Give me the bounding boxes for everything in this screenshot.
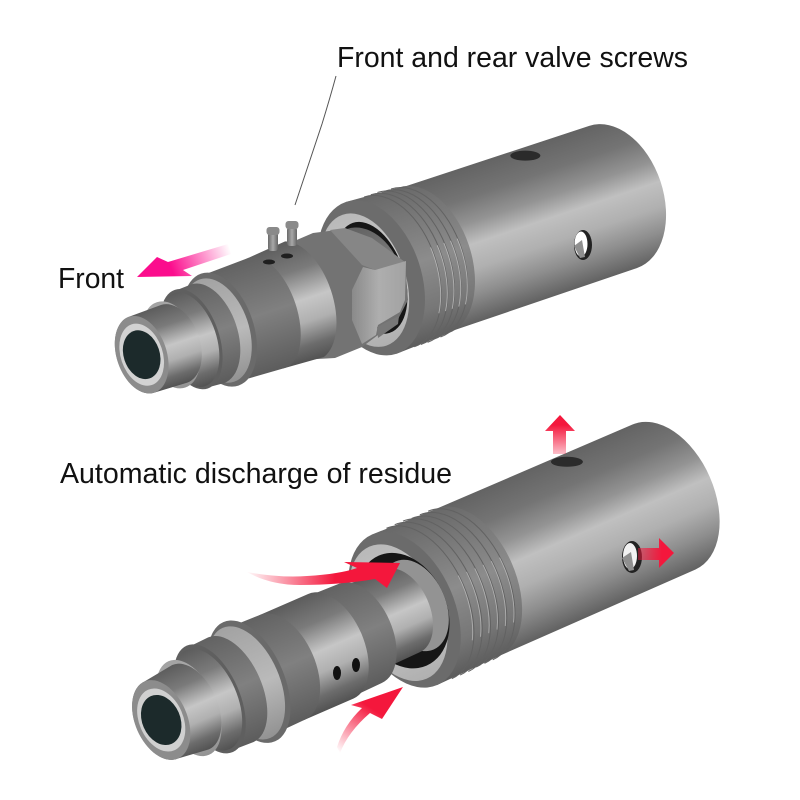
arrow: discharge through top hole (545, 415, 575, 454)
heading: front and rear valve screws: Front and rear valve screws (337, 42, 688, 74)
lower top hole (551, 457, 583, 467)
upper front quick connector (98, 232, 350, 420)
upper screw holes (263, 254, 293, 264)
upper top hole (510, 151, 540, 161)
lower rear housing (325, 402, 743, 705)
lower fitting (111, 402, 743, 790)
upper hex block (285, 228, 408, 360)
upper rear housing (275, 105, 686, 378)
upper fitting (98, 105, 686, 420)
lower front quick connector (111, 561, 415, 790)
arrow: inflow from above (247, 562, 400, 588)
heading: automatic discharge of residue: Automatic discharge of residue (60, 458, 452, 490)
lower screw holes (333, 658, 360, 680)
arrow: inflow from below (337, 687, 403, 753)
arrow: front direction (137, 244, 231, 277)
leader line to the screws (295, 76, 336, 205)
arrow: discharge through side hole (638, 538, 674, 568)
lower side hole (622, 541, 642, 573)
valve screws (266, 221, 298, 251)
upper side hole (574, 230, 592, 260)
label: front: Front (58, 263, 124, 295)
